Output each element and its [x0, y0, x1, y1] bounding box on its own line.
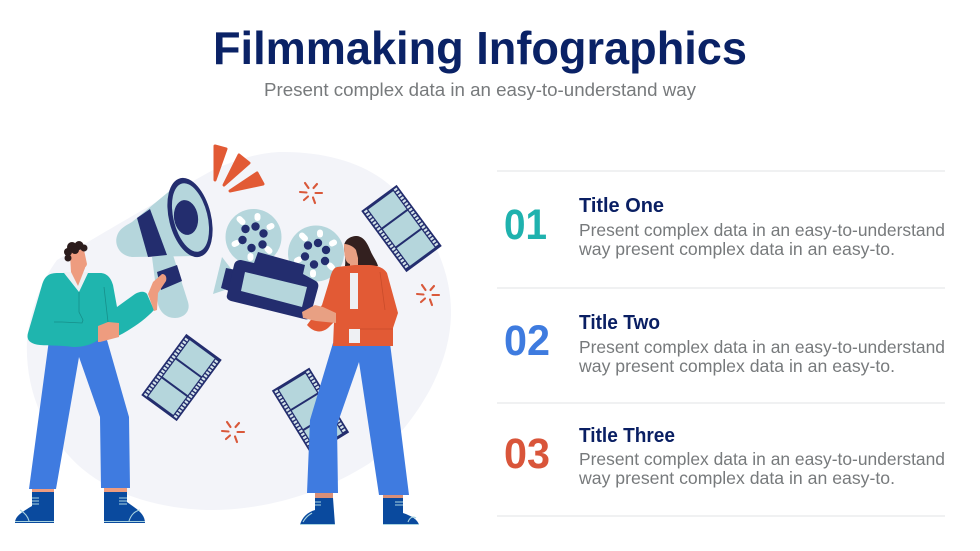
illustration: filmmaking scene	[15, 146, 451, 525]
man: shoe details	[15, 498, 145, 522]
film camera projector	[213, 209, 344, 319]
man: sweater detail lines	[54, 287, 108, 323]
divider lines	[497, 171, 945, 516]
man: hands	[148, 274, 166, 311]
woman	[300, 236, 419, 525]
icon: sparks	[222, 183, 439, 442]
man: ankles	[32, 487, 54, 493]
man: shoes	[15, 492, 145, 523]
woman: face and neck	[344, 244, 358, 270]
woman: ankles	[315, 492, 333, 499]
icon: red burst wedges	[215, 146, 263, 191]
number 01: 01	[504, 201, 547, 249]
title: Filmmaking Infographics	[213, 22, 747, 74]
item 02	[504, 312, 945, 376]
camera panel	[241, 272, 307, 307]
woman: shirt	[350, 273, 358, 309]
film strip top right	[361, 185, 442, 272]
woman: shoes	[300, 498, 419, 525]
item 03	[504, 425, 945, 488]
woman: shoe details	[300, 502, 419, 524]
camera body	[227, 252, 318, 319]
man: head	[71, 250, 87, 269]
woman: jacket detail lines	[360, 272, 393, 329]
item 01	[504, 195, 945, 259]
heading: title three: Title Three	[579, 425, 675, 447]
number 03: 03	[504, 430, 550, 478]
woman: jacket	[307, 265, 398, 346]
description two: Present complex data in an easy-to-understand	[579, 337, 945, 357]
woman: hair	[344, 236, 378, 266]
man: hair	[64, 241, 88, 262]
description one: Present complex data in an easy-to-understand	[579, 220, 945, 240]
man	[15, 241, 166, 523]
man: trousers	[29, 340, 130, 489]
description three: Present complex data in an easy-to-understand	[579, 449, 945, 469]
number 02: 02	[504, 317, 550, 365]
description three: way present complex data in an easy-to.	[578, 468, 895, 488]
camera reels	[226, 209, 282, 265]
heading: title one: Title One	[579, 195, 664, 217]
description one: way present complex data in an easy-to.	[578, 239, 895, 259]
man: neck and collar	[63, 272, 88, 292]
film strip behind woman	[272, 368, 349, 455]
heading: title two: Title Two	[579, 312, 660, 334]
woman: trousers	[307, 343, 409, 495]
man: sweater	[28, 273, 154, 347]
woman: hand	[302, 305, 336, 323]
camera lens	[213, 257, 232, 294]
description two: way present complex data in an easy-to.	[578, 356, 895, 376]
background blob	[27, 152, 451, 510]
subtitle: Present complex data in an easy-to-understand way	[264, 80, 696, 100]
megaphone	[116, 173, 220, 318]
film strip lower left	[141, 334, 222, 421]
